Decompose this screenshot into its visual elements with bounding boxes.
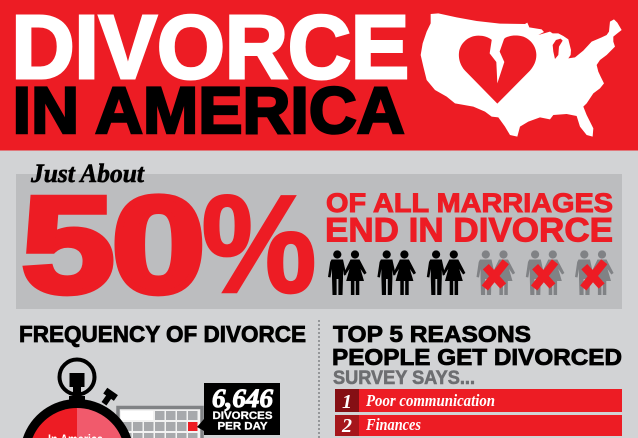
icon: stopwatch bbox=[23, 360, 131, 438]
icon: intact couple 2 bbox=[377, 250, 416, 295]
heading: top 5 reasons: TOP 5 REASONS bbox=[333, 321, 531, 347]
callout: 6,646 divorces per day: PER DAY bbox=[218, 420, 268, 432]
highlighted day bbox=[188, 422, 198, 431]
callout: 6,646 divorces per day: DIVORCES bbox=[212, 410, 272, 422]
title: Divorce: DIVORCE bbox=[12, 0, 409, 98]
big number: 50%: 5 bbox=[22, 169, 114, 322]
reason 1 bar: 1 bbox=[342, 391, 352, 413]
heading: top 5 reasons: PEOPLE GET DIVORCED bbox=[332, 344, 622, 370]
icon: crossed couple 6 bbox=[575, 250, 614, 295]
reason 1 bar bbox=[335, 389, 622, 413]
callout: 6,646 divorces per day bbox=[197, 383, 280, 435]
reason 2 bar bbox=[335, 415, 622, 437]
callout: 6,646 divorces per day: 6,646 bbox=[212, 384, 273, 413]
icon: intact couple 1 bbox=[328, 250, 367, 295]
reason 2 bar: Finances bbox=[365, 415, 421, 434]
big number: 50%: % bbox=[202, 167, 316, 322]
icon: calendar bbox=[118, 408, 202, 438]
icon: intact couple 3 bbox=[427, 250, 465, 295]
subheading: survey says: SURVEY SAYS... bbox=[333, 368, 475, 389]
text: of all marriages end in divorce: END IN DIVORCE bbox=[325, 212, 613, 250]
text: of all marriages end in divorce: OF ALL MARRIAGES bbox=[326, 188, 613, 218]
heading: frequency of divorce: FREQUENCY OF DIVORCE bbox=[19, 321, 306, 347]
reason 1 bar: Poor communication bbox=[365, 391, 495, 410]
icon: US map with broken heart bbox=[421, 13, 622, 137]
icon: crossed couple 5 bbox=[526, 250, 564, 295]
reason 2 bar: 2 bbox=[341, 415, 352, 437]
header banner bbox=[0, 0, 638, 150]
big number: 50%: 0 bbox=[112, 169, 206, 322]
heading: top 5 reasons bbox=[332, 321, 622, 370]
panel: 50 percent statistic bbox=[16, 159, 622, 322]
big number: 50% bbox=[22, 167, 316, 322]
text: of all marriages end in divorce bbox=[325, 188, 613, 250]
title: In America: IN AMERICA bbox=[13, 73, 405, 147]
icon: crossed couple 4 bbox=[476, 250, 515, 295]
text: Just About: Just About bbox=[30, 159, 145, 188]
